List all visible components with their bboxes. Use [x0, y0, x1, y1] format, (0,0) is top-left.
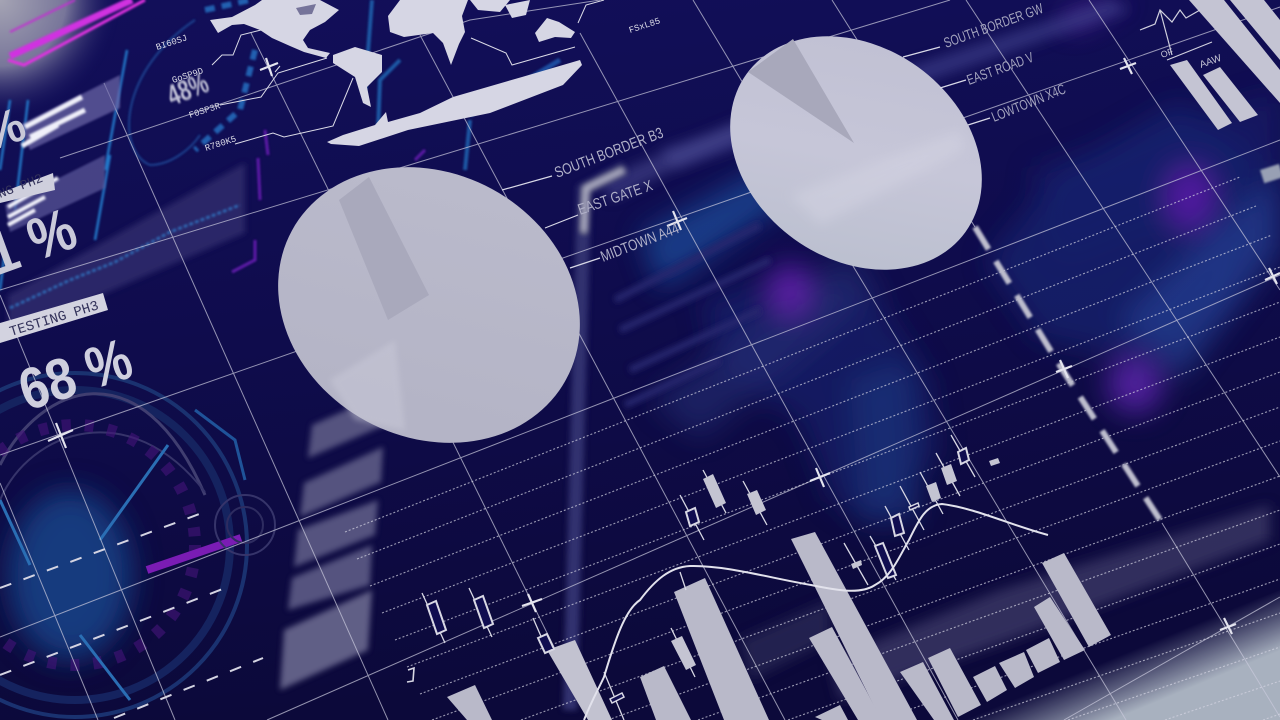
pie labels left — [502, 123, 682, 268]
map code labels: FSxL85 — [628, 16, 662, 36]
map code labels: GoSP9D — [171, 66, 205, 86]
tag testing ph3 — [0, 293, 108, 343]
grey dashed divider — [975, 227, 1162, 523]
pie slice — [748, 39, 854, 143]
map code labels: F0SP3R — [188, 101, 222, 121]
background panel frame — [570, 168, 770, 710]
value 68 percent: 68 % — [11, 326, 140, 423]
bright lower right shape — [960, 590, 1280, 720]
map code labels: BI60SJ — [155, 33, 189, 53]
pie slice — [339, 177, 429, 320]
purple band top — [20, 75, 120, 150]
gauge — [0, 373, 275, 717]
top right chart — [1140, 0, 1280, 183]
wavy blue line — [10, 205, 240, 308]
pie labels left: MIDTOWN A44 — [598, 219, 682, 265]
Africa — [388, 0, 468, 65]
label AAW: AAW — [1198, 53, 1224, 71]
pie chart right — [685, 0, 1027, 318]
magenta lines — [8, 0, 425, 272]
pie labels right: SOUTH BORDER GW — [942, 0, 1046, 51]
North America — [210, 0, 339, 58]
dotted chart lines — [345, 177, 1280, 720]
bars — [1170, 0, 1280, 130]
South America — [333, 47, 382, 107]
bar chart — [447, 532, 1111, 720]
cross markers — [48, 58, 1280, 634]
Asia fragments — [470, 0, 530, 18]
pie labels left: EAST GATE X — [575, 176, 655, 218]
blurred background bands — [600, 0, 1270, 700]
top left glow — [0, 0, 120, 120]
Antarctica — [327, 60, 582, 146]
world map — [210, 0, 582, 146]
map code labels — [155, 16, 662, 154]
tag text ph3: TESTING PH3 — [8, 298, 101, 341]
label OF: OF — [1159, 46, 1175, 60]
dashed lines — [0, 513, 263, 718]
small grey tag — [1260, 164, 1280, 183]
white stripes middle — [8, 178, 58, 225]
pie reflection — [330, 340, 405, 430]
background stacked panel — [280, 393, 385, 690]
left data bars — [0, 75, 140, 423]
map code labels: 48% — [163, 67, 213, 112]
purple band middle — [5, 155, 105, 232]
map leader lines — [212, 0, 604, 144]
pie labels right — [903, 0, 1068, 125]
dashes and pulse — [1140, 10, 1212, 60]
Greenland lake mark — [296, 4, 316, 15]
blurred background world map — [640, 0, 1280, 530]
pie chart left — [229, 115, 629, 495]
tag testing ph2 — [0, 173, 55, 203]
pie reflection — [790, 130, 965, 225]
map code labels: R780K5 — [204, 134, 238, 154]
pie labels right: EAST ROAD V — [965, 49, 1036, 88]
white stripes top — [22, 97, 85, 146]
map background arcs — [129, 0, 560, 170]
Australia — [535, 18, 575, 42]
candlesticks — [407, 435, 1000, 720]
trend curve — [584, 504, 1048, 720]
left dark blue band — [8, 163, 245, 335]
pie labels left: SOUTH BORDER B3 — [552, 123, 666, 181]
left blue brackets — [0, 50, 127, 290]
pie labels right: LOWTOWN X4C — [989, 81, 1068, 125]
